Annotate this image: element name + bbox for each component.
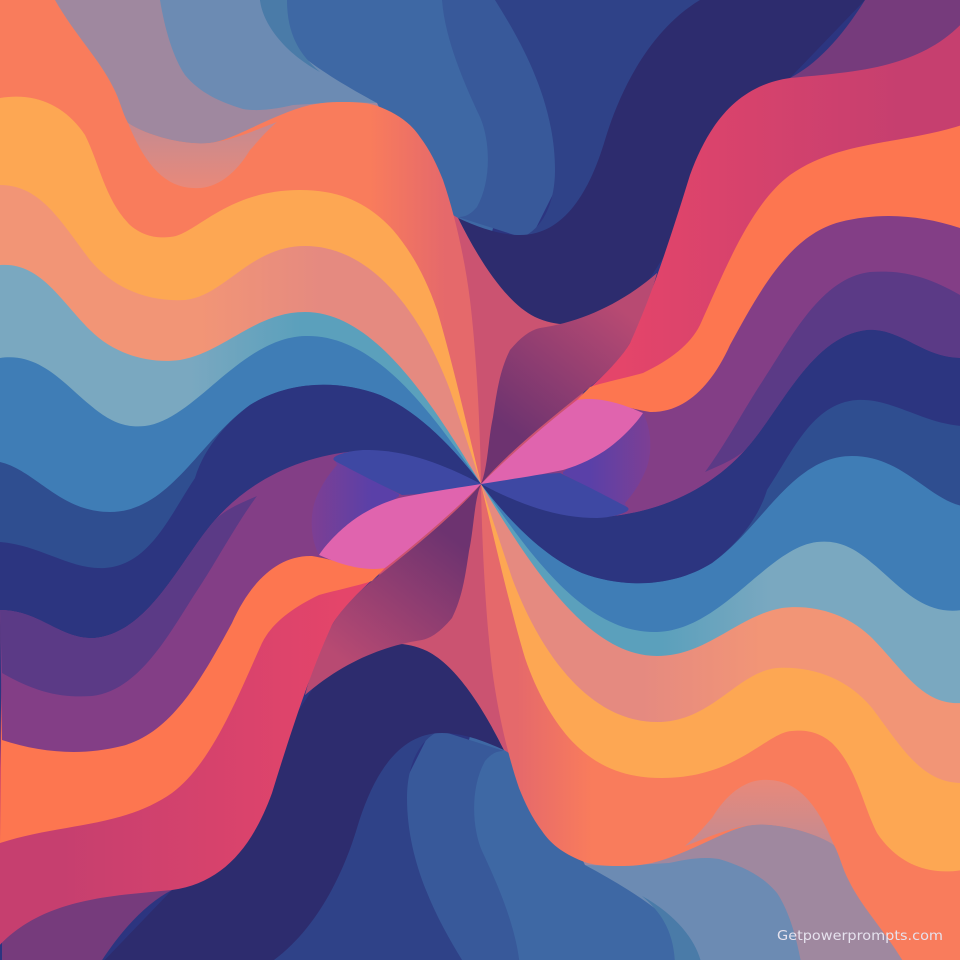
- band: blue: [260, 0, 520, 240]
- band: dark purple right: [705, 272, 960, 472]
- wedge: rose centre: [445, 210, 657, 484]
- wedge: pink: [481, 399, 643, 484]
- wedge: maroon centre: [481, 273, 657, 484]
- band: teal: [0, 265, 481, 600]
- wedge: violet: [563, 413, 650, 508]
- band: peach: [0, 185, 481, 600]
- band: orange right: [481, 125, 960, 484]
- band: teal-blue sliver: [260, 0, 320, 72]
- shade: salmon in orange band: [128, 122, 277, 188]
- band: yellow: [0, 97, 481, 600]
- half of the swirl: left and top bands: [0, 0, 960, 638]
- other half of the swirl, rotated around the centre: [0, 330, 960, 960]
- band: mauve: [50, 0, 480, 200]
- band: navy blue: [495, 0, 720, 240]
- watermark: Getpowerprompts.com: [777, 929, 943, 944]
- band: mid navy left: [0, 385, 481, 600]
- band: crimson: [481, 20, 960, 484]
- band: orange left: [0, 0, 481, 600]
- band: dark navy left: [0, 385, 481, 638]
- band: purple right: [481, 216, 960, 517]
- band: medium blue: [442, 0, 600, 240]
- band: purple corner: [790, 0, 960, 140]
- band: steel blue: [160, 0, 377, 110]
- centre wedges, lower left: [312, 450, 481, 569]
- wedge: indigo: [481, 473, 629, 518]
- centre wedges, upper right: [481, 399, 650, 518]
- band: blue left: [0, 336, 481, 600]
- band: dark navy top: [458, 0, 865, 324]
